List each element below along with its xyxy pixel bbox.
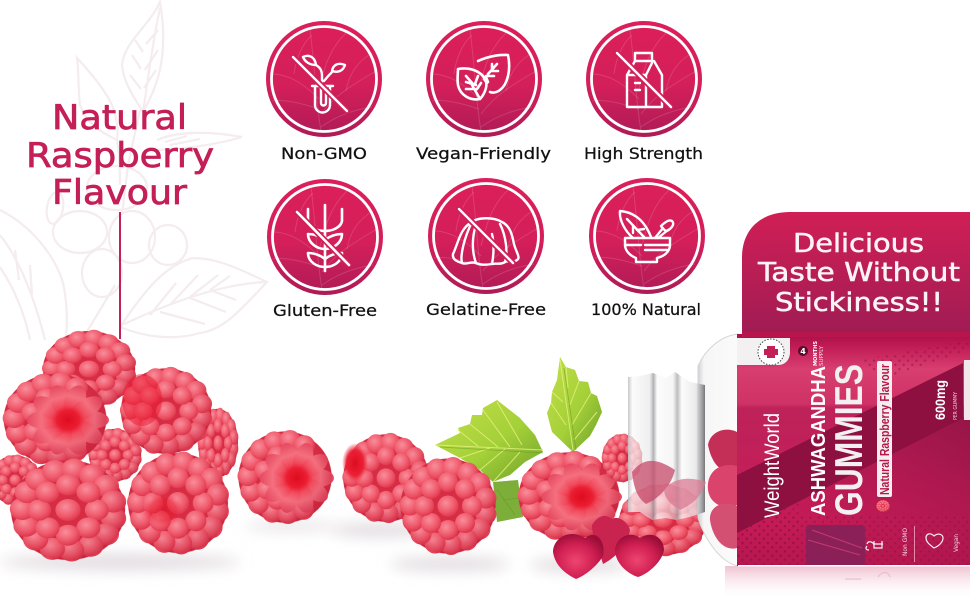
bottle shoulder — [698, 334, 738, 566]
icon: jelly mould crossed out — [453, 209, 519, 265]
bottle neck with ribs — [628, 372, 706, 520]
heading: Natural Raspberry Flavour — [26, 98, 214, 213]
badge: Non-GMO — [266, 21, 382, 163]
background botanical line art — [0, 2, 267, 340]
tabletop shadows — [0, 522, 630, 572]
heading: Natural Raspberry Flavour: Natural — [52, 98, 187, 138]
banner: Delicious Taste Without Stickiness — [742, 212, 970, 338]
badge: Vegan-Friendly: Vegan-Friendly — [416, 144, 551, 163]
bottle label: Vegan — [952, 534, 960, 552]
glass bottle — [628, 334, 738, 566]
product name: ASHWAGANDHA — [808, 366, 830, 516]
supply badge — [798, 346, 808, 356]
banner: Delicious Taste Without Stickiness: Taste Without — [757, 258, 960, 288]
badge: Gluten-Free: Gluten-Free — [273, 301, 377, 320]
gummies inside bottle — [708, 430, 737, 549]
badge: High Strength — [584, 21, 703, 163]
badge: Gelatine-Free: Gelatine-Free — [426, 300, 546, 319]
diagonal dark band — [737, 363, 963, 533]
banner: Delicious Taste Without Stickiness: Stickiness!! — [775, 288, 943, 318]
bottle label — [737, 334, 970, 566]
brand name: WeightWorld — [761, 413, 784, 518]
icon: mortar, pestle and leaf — [620, 211, 673, 262]
bottle label: SUPPLY — [819, 345, 825, 366]
halftone lower panel — [737, 515, 970, 565]
right side darkening — [737, 414, 970, 566]
seal panel — [737, 338, 790, 365]
heading: Natural Raspberry Flavour: Raspberry — [26, 136, 214, 176]
bottle label: Non GMO — [901, 528, 909, 556]
raspberries centre — [342, 433, 708, 556]
badge: Gelatine-Free — [426, 178, 546, 319]
raspberry icon on label — [876, 500, 890, 512]
icon: carton crossed out — [617, 53, 671, 107]
heading: Natural Raspberry Flavour: Flavour — [52, 173, 187, 213]
raspberry pile left — [0, 330, 238, 561]
raspberry single — [237, 430, 334, 524]
bottle label: 4 — [800, 347, 806, 356]
label lower edge — [738, 565, 970, 566]
icon: plant in test tube crossed out — [293, 56, 347, 113]
reflection under bottle — [725, 566, 970, 600]
dosage: 600mg — [932, 380, 948, 420]
flavour pill: Natural Raspberry Flavour — [877, 364, 892, 495]
banner: Delicious Taste Without Stickiness: Delicious — [793, 229, 924, 259]
icon: two leaves — [458, 55, 509, 99]
callout line from heading to raspberries — [119, 212, 121, 339]
raspberry leaves — [435, 357, 602, 522]
badge: Non-GMO: Non-GMO — [281, 144, 367, 163]
bottle label: GUMMIES — [828, 364, 871, 516]
badge: Vegan-Friendly — [416, 21, 551, 163]
bottle label: PER GUMMY — [953, 391, 959, 420]
label icons — [866, 534, 943, 550]
badge: 100% Natural: 100% Natural — [591, 300, 701, 319]
icon: wheat crossed out — [297, 205, 349, 271]
badge: High Strength: High Strength — [584, 144, 703, 163]
badge: Gluten-Free — [267, 179, 383, 320]
bottle label: MONTHS — [813, 341, 819, 366]
badge: 100% Natural — [589, 178, 705, 319]
gummy hearts — [553, 516, 664, 579]
